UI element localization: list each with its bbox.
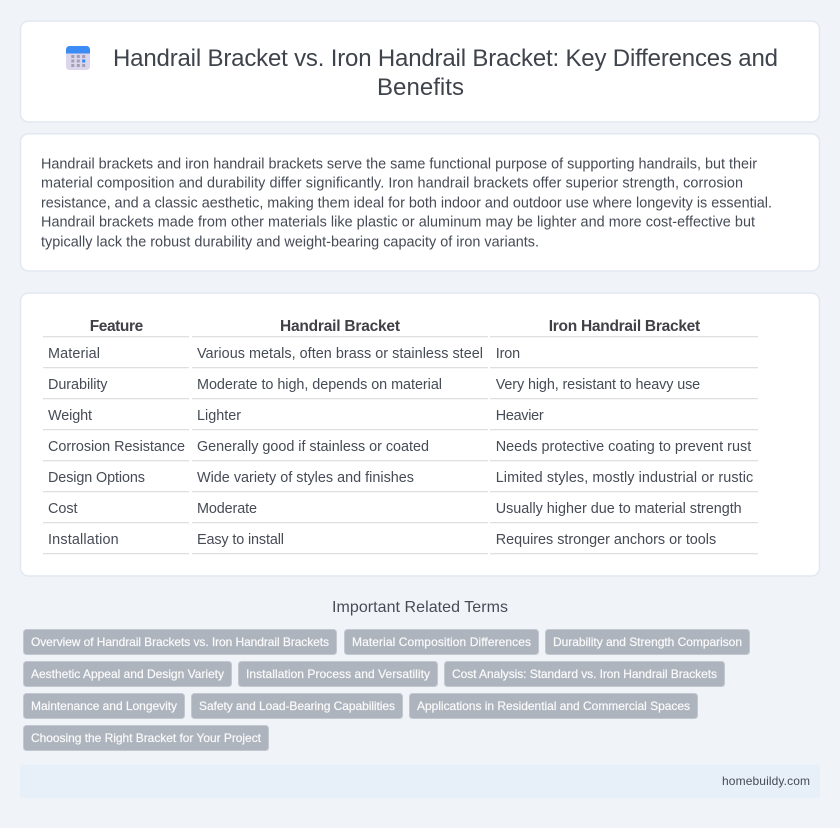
footer [20, 764, 820, 798]
related terms tags: Choosing the Right Bracket for Your Project [31, 731, 262, 745]
row: durability: Moderate to high, depends on material [197, 377, 442, 393]
row: corrosion resistance: Corrosion Resistance [48, 439, 185, 455]
row: corrosion resistance [48, 439, 751, 455]
row: weight [48, 408, 544, 424]
text block: description: material composition and durability differ significantly. Iron handrail brackets offer superior strength, corrosion [41, 176, 743, 192]
row: material [48, 346, 520, 362]
row: design options: Limited styles, mostly industrial or rustic [496, 470, 753, 486]
text block: description: resistance, and a classic aesthetic, making them ideal for both indoor and outdoor use where longevity is essential. [41, 195, 772, 211]
panel: description [20, 134, 820, 271]
related terms tags: Aesthetic Appeal and Design Variety [31, 667, 224, 681]
row: design options [48, 470, 753, 486]
row: durability: Very high, resistant to heavy use [496, 377, 700, 393]
related terms tags: Durability and Strength Comparison [553, 635, 742, 649]
related terms tags: Applications in Residential and Commercial Spaces [417, 699, 690, 713]
row: installation: Installation [48, 532, 119, 548]
row: design options: Design Options [48, 470, 145, 486]
header panel [20, 21, 820, 122]
footer: homebuildy.com [722, 774, 810, 788]
row: cost [48, 501, 742, 517]
row: corrosion resistance: Generally good if stainless or coated [197, 439, 429, 455]
related terms tags: Installation Process and Versatility [246, 667, 430, 681]
row: weight: Heavier [496, 408, 544, 424]
table header [90, 318, 700, 335]
table header: Iron Handrail Bracket [549, 318, 700, 335]
table header: Handrail Bracket [280, 318, 400, 335]
row: design options: Wide variety of styles and finishes [197, 470, 414, 486]
text block: description: typically lack the robust durability and weight-bearing capacity of iron variants. [41, 235, 539, 251]
row: installation: Requires stronger anchors or tools [496, 532, 716, 548]
row: durability [48, 377, 700, 393]
row: material: Material [48, 346, 100, 362]
heading: important related terms: Important Related Terms [332, 599, 508, 616]
row: cost: Cost [48, 501, 78, 517]
row: installation [48, 532, 716, 548]
related terms tags [24, 630, 750, 750]
related terms tags: Safety and Load-Bearing Capabilities [199, 699, 395, 713]
table header: Feature [90, 318, 144, 335]
title: Handrail Bracket vs. Iron Handrail Bracket: Key Differences and [113, 45, 778, 72]
text block: description: Handrail brackets made from other materials like plastic or aluminum may be lighter and more cost-effective but [41, 215, 755, 231]
row: weight: Lighter [197, 408, 241, 424]
row: material: Iron [496, 346, 520, 362]
row: corrosion resistance: Needs protective coating to prevent rust [496, 439, 751, 455]
row: material: Various metals, often brass or stainless steel [197, 346, 483, 362]
related terms tags: Material Composition Differences [352, 635, 531, 649]
icon: calendar [66, 46, 90, 70]
related terms tags: Maintenance and Longevity [31, 699, 177, 713]
row: weight: Weight [48, 408, 92, 424]
related terms tags: Cost Analysis: Standard vs. Iron Handrail Brackets [452, 667, 717, 681]
row: cost: Moderate [197, 501, 257, 517]
related terms tags: Overview of Handrail Brackets vs. Iron Handrail Brackets [31, 635, 329, 649]
text block: description [41, 156, 772, 251]
row: durability: Durability [48, 377, 108, 393]
row: installation: Easy to install [197, 532, 284, 548]
panel: comparison table [20, 293, 820, 576]
text block: description: Handrail brackets and iron handrail brackets serve the same functional purpose of supporting handrails, but their [41, 156, 757, 172]
title: Benefits [377, 74, 464, 101]
title [113, 45, 778, 101]
row: cost: Usually higher due to material strength [496, 501, 742, 517]
